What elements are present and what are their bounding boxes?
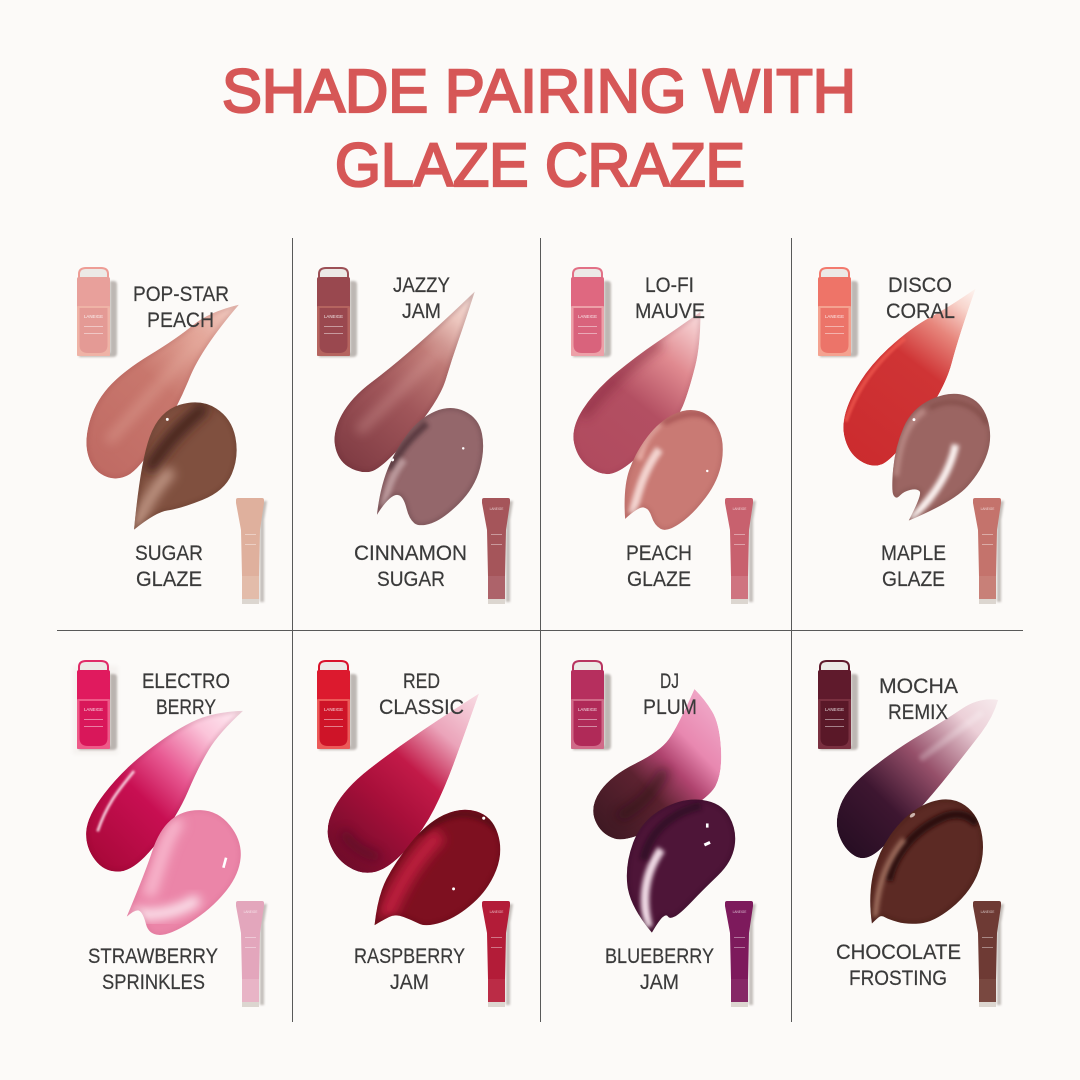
product: Maple Glaze tube: LANEIGE — [981, 507, 994, 511]
product: Raspberry Jam tube: LANEIGE — [490, 910, 503, 914]
product: Chocolate Frosting tube — [973, 901, 1004, 1007]
product: DJ Plum balm stick: LANEIGE — [578, 707, 597, 712]
label: Sugar Glaze — [135, 541, 203, 591]
label: Red Classic: RED — [403, 669, 440, 693]
panel: Red Classic and Raspberry Jam — [317, 661, 513, 1007]
swatch: Jazzy Jam — [334, 291, 475, 472]
label: Cinnamon Sugar: CINNAMON — [354, 541, 467, 565]
swatch: Sugar Glaze — [134, 402, 237, 530]
product: Cinnamon Sugar tube: LANEIGE — [490, 507, 503, 511]
label: Strawberry Sprinkles — [88, 944, 218, 994]
label: Lo-Fi Mauve: MAUVE — [635, 299, 705, 323]
panel: Disco Coral and Maple Glaze — [818, 268, 1004, 604]
label: Peach Glaze — [626, 541, 692, 591]
label: Raspberry Jam: RASPBERRY — [354, 944, 465, 968]
label: Pop-Star Peach — [133, 282, 229, 332]
swatch: Peach Glaze — [624, 410, 723, 530]
product: Strawberry Sprinkles tube — [236, 901, 267, 1007]
product: Red Classic balm stick — [317, 661, 357, 750]
label: Raspberry Jam — [354, 944, 465, 994]
product: Blueberry Jam tube — [725, 901, 756, 1007]
swatch: Cinnamon Sugar — [377, 408, 484, 526]
swatch: Pop-Star Peach — [86, 305, 239, 479]
product: Maple Glaze tube — [973, 498, 1004, 604]
label: Cinnamon Sugar — [354, 541, 467, 591]
product: Chocolate Frosting tube: LANEIGE — [981, 910, 994, 914]
label: Sugar Glaze: GLAZE — [136, 567, 202, 591]
label: Raspberry Jam: JAM — [390, 970, 429, 994]
swatch: Electro Berry — [86, 711, 243, 872]
label: Disco Coral: DISCO — [888, 273, 952, 297]
label: Electro Berry: BERRY — [156, 695, 216, 719]
label: DJ Plum — [643, 669, 697, 719]
title: GLAZE CRAZE — [335, 131, 745, 200]
product: Red Classic balm stick: LANEIGE — [324, 707, 343, 712]
label: Electro Berry — [142, 669, 230, 719]
product: Lo-Fi Mauve balm stick — [571, 268, 611, 357]
swatch: Maple Glaze — [892, 394, 990, 520]
product: Pop-Star Peach balm stick: LANEIGE — [84, 314, 103, 319]
product: Electro Berry balm stick: LANEIGE — [84, 707, 103, 712]
label: DJ Plum: DJ — [660, 669, 679, 693]
product: Strawberry Sprinkles tube: LANEIGE — [244, 910, 257, 914]
swatch: Blueberry Jam — [626, 800, 736, 932]
product: Lo-Fi Mauve balm stick: LANEIGE — [578, 314, 597, 319]
label: Red Classic — [379, 669, 464, 719]
swatch: DJ Plum — [593, 689, 721, 839]
label: Mocha Remix — [879, 674, 959, 724]
product: Mocha Remix balm stick — [818, 661, 858, 750]
product: Blueberry Jam tube: LANEIGE — [733, 910, 746, 914]
label: Jazzy Jam: JAM — [402, 299, 441, 323]
product: Peach Glaze tube: LANEIGE — [733, 507, 746, 511]
label: Peach Glaze: PEACH — [626, 541, 692, 565]
label: Chocolate Frosting — [836, 940, 961, 990]
label: Electro Berry: ELECTRO — [142, 669, 230, 693]
panel: DJ Plum and Blueberry Jam — [571, 661, 756, 1007]
panel: Lo-Fi Mauve and Peach Glaze — [571, 268, 756, 604]
label: Disco Coral — [886, 273, 955, 323]
product: Pop-Star Peach balm stick — [77, 268, 117, 357]
label: Jazzy Jam — [393, 273, 450, 323]
label: Strawberry Sprinkles: STRAWBERRY — [88, 944, 218, 968]
product: Electro Berry balm stick — [73, 661, 118, 754]
product: Disco Coral balm stick: LANEIGE — [825, 314, 844, 319]
label: DJ Plum: PLUM — [643, 695, 697, 719]
product: DJ Plum balm stick — [571, 661, 611, 750]
swatch: Strawberry Sprinkles — [126, 810, 241, 935]
product: Disco Coral balm stick — [818, 268, 858, 357]
label: Chocolate Frosting: FROSTING — [849, 966, 947, 990]
title: SHADE PAIRING WITH — [222, 57, 856, 126]
label: Blueberry Jam: JAM — [640, 970, 679, 994]
label: Jazzy Jam: JAZZY — [393, 273, 450, 297]
label: Pop-Star Peach: PEACH — [147, 308, 214, 332]
swatch: Red Classic — [328, 693, 479, 873]
label: Peach Glaze: GLAZE — [627, 567, 691, 591]
product: Mocha Remix balm stick: LANEIGE — [825, 707, 844, 712]
product: Jazzy Jam balm stick: LANEIGE — [324, 314, 343, 319]
swatch: Lo-Fi Mauve — [573, 312, 701, 474]
label: Sugar Glaze: SUGAR — [135, 541, 203, 565]
panel: Pop-Star Peach and Sugar Glaze — [77, 268, 267, 604]
swatch: Raspberry Jam — [374, 810, 500, 926]
label: Cinnamon Sugar: SUGAR — [377, 567, 445, 591]
label: Lo-Fi Mauve: LO-FI — [645, 273, 694, 297]
product: Raspberry Jam tube — [482, 901, 513, 1007]
panel: Jazzy Jam and Cinnamon Sugar — [317, 268, 513, 604]
swatch: Disco Coral — [843, 288, 976, 466]
label: Maple Glaze: GLAZE — [882, 567, 945, 591]
product: Cinnamon Sugar tube — [482, 498, 513, 604]
label: Lo-Fi Mauve — [635, 273, 705, 323]
label: Chocolate Frosting: CHOCOLATE — [836, 940, 961, 964]
label: Blueberry Jam: BLUEBERRY — [605, 944, 714, 968]
label: Maple Glaze — [881, 541, 946, 591]
product: Sugar Glaze tube — [236, 498, 267, 604]
label: Mocha Remix: REMIX — [888, 700, 948, 724]
panel: Electro Berry and Strawberry Sprinkles — [73, 661, 267, 1007]
product: Peach Glaze tube — [725, 498, 756, 604]
label: Red Classic: CLASSIC — [379, 695, 464, 719]
title — [222, 57, 856, 200]
label: Disco Coral: CORAL — [886, 299, 955, 323]
label: Pop-Star Peach: POP-STAR — [133, 282, 229, 306]
swatch: Chocolate Frosting — [870, 799, 983, 924]
label: Maple Glaze: MAPLE — [881, 541, 946, 565]
panel: Mocha Remix and Chocolate Frosting — [818, 661, 1004, 1007]
label: Blueberry Jam — [605, 944, 714, 994]
label: Strawberry Sprinkles: SPRINKLES — [102, 970, 205, 994]
label: Mocha Remix: MOCHA — [879, 674, 959, 698]
product: Jazzy Jam balm stick — [317, 268, 357, 357]
swatch: Mocha Remix — [837, 699, 998, 858]
